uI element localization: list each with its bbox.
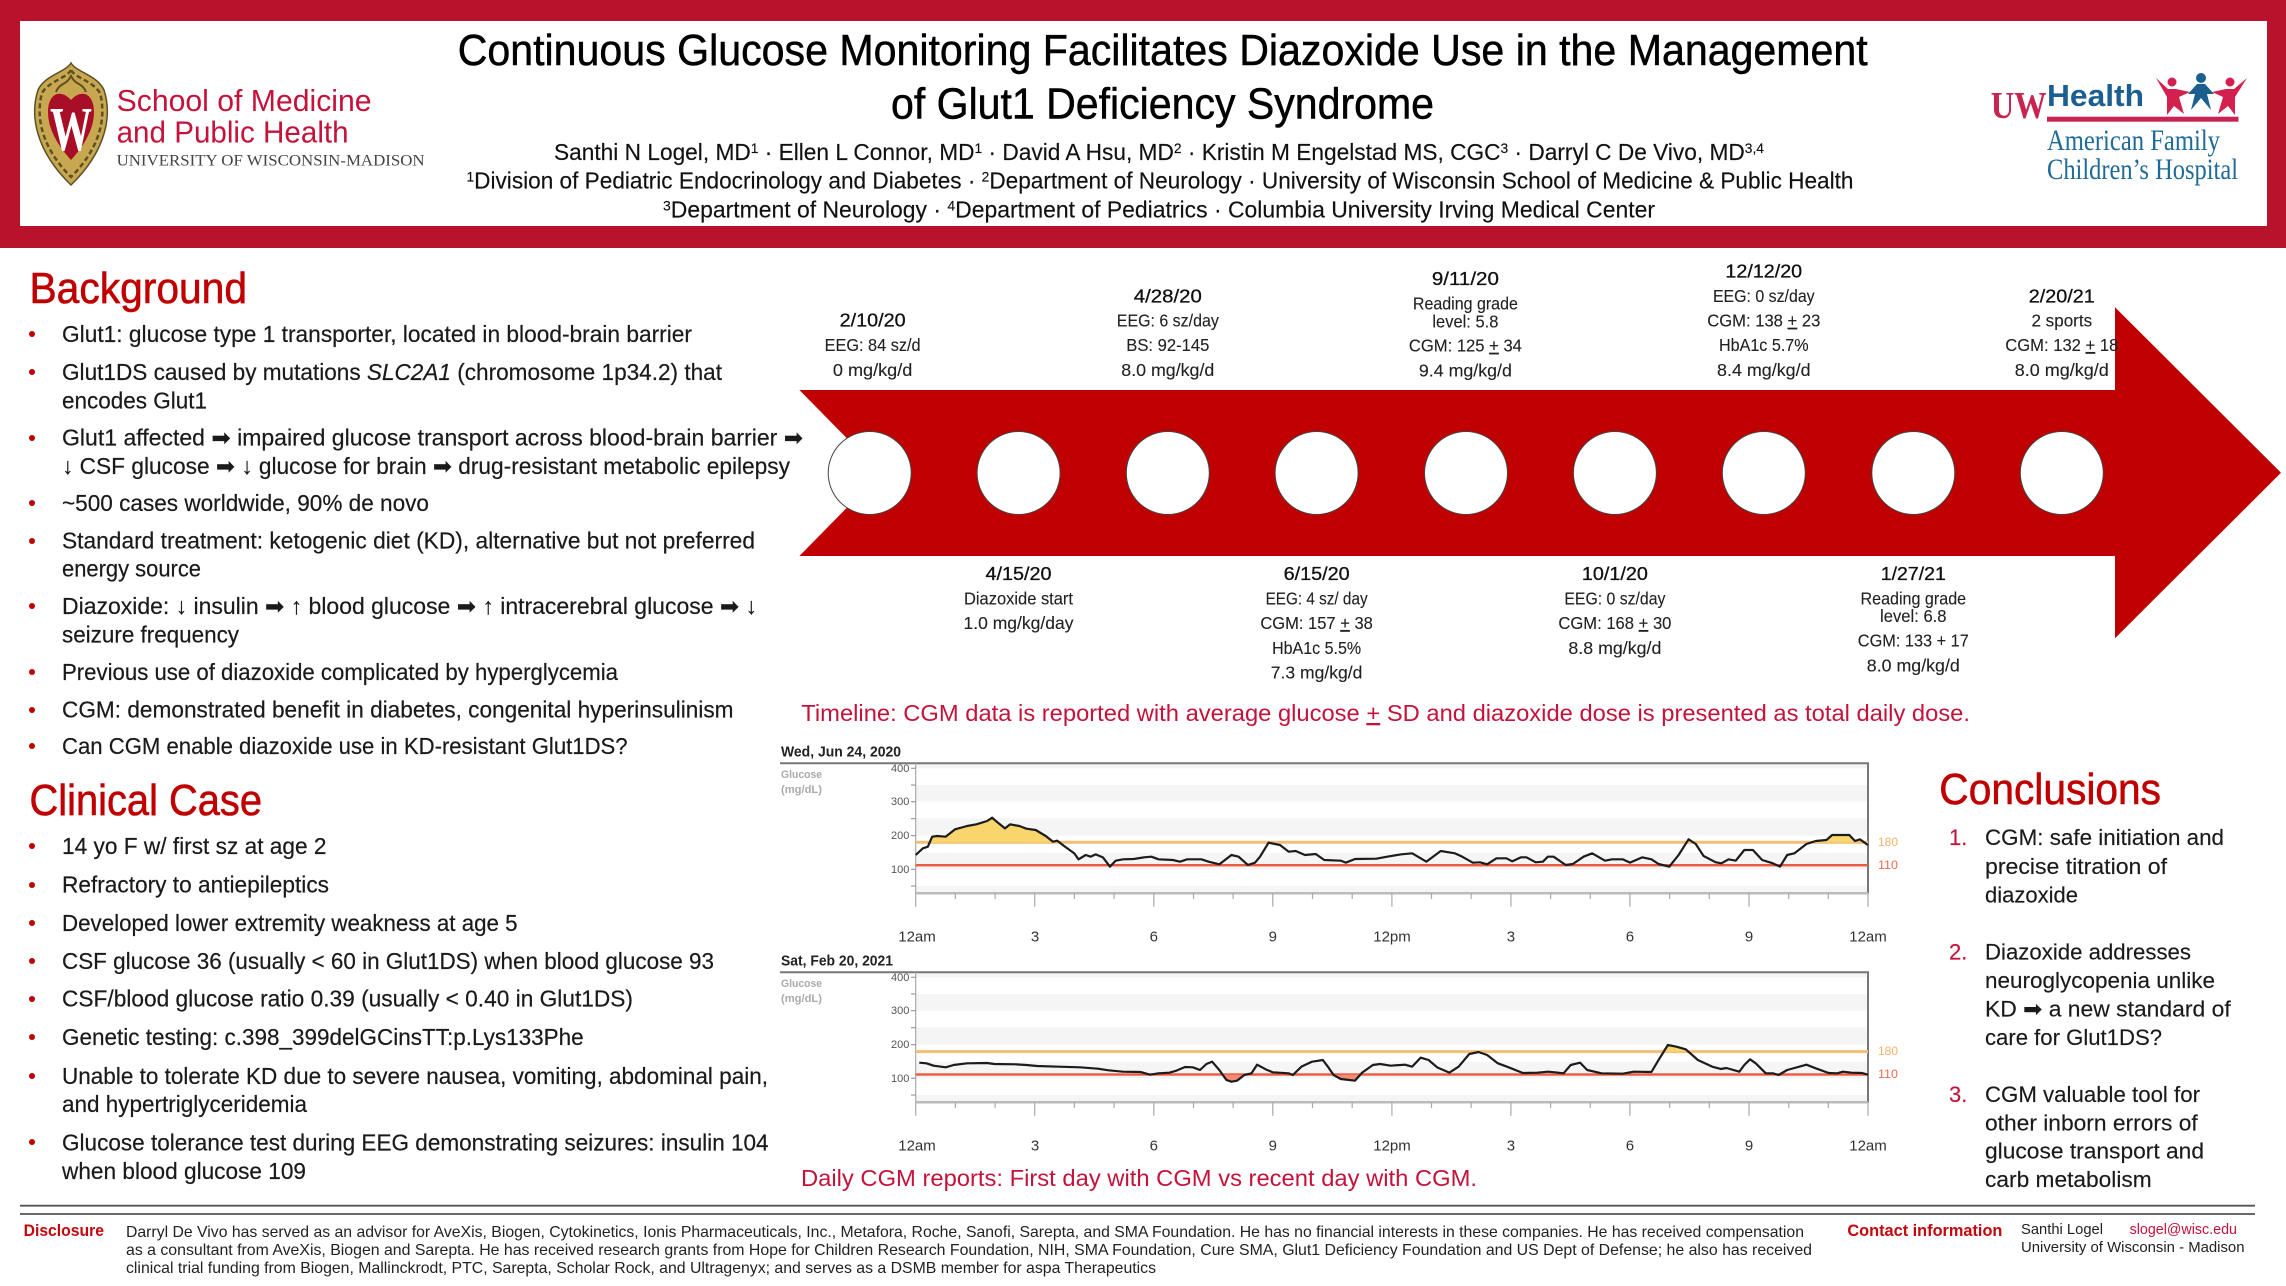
- authors and affiliations: · Kristin M Engelstad MS, CGC: [1182, 139, 1501, 165]
- time axis labels: 12am: [1849, 929, 1887, 946]
- bullet list: clinical case: and hypertriglyceridemia: [62, 1091, 307, 1117]
- glucose trace: [919, 1045, 1868, 1082]
- axis: glucose: 400: [891, 763, 909, 775]
- bullet list: background: ~500 cases worldwide, 90% de novo: [62, 490, 429, 516]
- logo: UW Health American Family Children's Hospital: Children’s Hospital: [2047, 153, 2238, 186]
- conclusion 3: 3.: [1949, 1082, 1967, 1107]
- bullet list: background: [29, 321, 803, 759]
- event: 1/27/21: 8.0 mg/kg/d: [1867, 656, 1960, 676]
- time axis labels: 12am: [1849, 1138, 1887, 1155]
- authors and affiliations: 3: [663, 197, 671, 213]
- bullet list: background: seizure frequency: [62, 622, 239, 648]
- footer: disclosure: clinical trial funding from Biogen, Mallinckrodt, PTC, Sarepta, Scholar Rock, and Ultragenyx; and serves as a DSMB member for aspa Therapeutics: [126, 1260, 1156, 1277]
- conclusion 3: other inborn errors of: [1985, 1111, 2199, 1136]
- authors and affiliations: · Darryl C De Vivo, MD: [1508, 139, 1745, 165]
- event: 10/1/20: CGM: 168 + 30: [1558, 613, 1672, 633]
- axis: glucose: (mg/dL): [781, 993, 822, 1005]
- axis: glucose: 100: [891, 864, 909, 876]
- authors and affiliations: · David A Hsu, MD: [982, 139, 1174, 165]
- axis: glucose: 200: [891, 830, 909, 842]
- event: 9/11/20: Reading grade: [1413, 293, 1518, 313]
- authors and affiliations: 1: [466, 169, 474, 185]
- logo text: UNIVERSITY OF WISCONSIN-MADISON: [117, 153, 425, 170]
- target lines: 110: [1878, 1067, 1898, 1081]
- event: 1/27/21: [1858, 563, 1969, 676]
- event: 4/28/20: [1117, 285, 1219, 380]
- bullet list: background: Standard treatment: ketogenic diet (KD), alternative but not preferred: [62, 528, 755, 554]
- bullet list: clinical case: [29, 833, 769, 1184]
- logo text: School of Medicine: [117, 83, 372, 118]
- event: 4/15/20: 1.0 mg/kg/day: [964, 613, 1074, 633]
- authors and affiliations: 4: [947, 197, 955, 213]
- bullet list: background: Glut1DS caused by mutations SLC2A1 (chromosome 1p34.2) that: [62, 359, 723, 385]
- conclusion 2: KD ➡ a new standard of: [1985, 997, 2232, 1022]
- time axis labels: 6: [1150, 1138, 1158, 1155]
- time axis labels: [898, 1138, 1887, 1155]
- event: 1/27/21: level: 6.8: [1880, 606, 1947, 626]
- bullet list: background: CGM: demonstrated benefit in diabetes, congenital hyperinsulinism: [62, 697, 734, 723]
- chart: Sat, Feb 20, 2021: [780, 953, 1898, 1155]
- event: 9/11/20: [1409, 268, 1522, 381]
- event: 12/12/20: [1707, 261, 1820, 380]
- bullet list: background: Diazoxide: ↓ insulin ➡ ↑ blood glucose ➡ ↑ intracerebral glucose ➡ ↓: [62, 593, 757, 619]
- event: 2/20/21: 2 sports: [2031, 311, 2092, 331]
- footer: disclosure: Disclosure: [24, 1221, 104, 1240]
- footer: contact information: [1847, 1221, 2244, 1256]
- footer: disclosure: [24, 1221, 1812, 1277]
- time axis labels: 3: [1507, 929, 1515, 946]
- event: 9/11/20: 9/11/20: [1432, 268, 1499, 289]
- conclusion 2: Diazoxide addresses: [1985, 939, 2191, 964]
- event: 1/27/21: CGM: 133 + 17: [1858, 631, 1969, 651]
- logo: UW Health American Family Children's Hospital: American Family: [2047, 124, 2220, 157]
- event: 12/12/20: EEG: 0 sz/day: [1713, 286, 1815, 306]
- event: 12/12/20: 8.4 mg/kg/d: [1717, 360, 1811, 380]
- axis: glucose: 300: [891, 1005, 909, 1017]
- bullet list: clinical case: Glucose tolerance test during EEG demonstrating seizures: insulin 104: [62, 1130, 769, 1156]
- authors and affiliations: Santhi N Logel, MD: [554, 139, 753, 165]
- axis: glucose: 300: [891, 796, 909, 808]
- event: 6/15/20: 7.3 mg/kg/d: [1271, 662, 1362, 682]
- bullet list: clinical case: when blood glucose 109: [61, 1158, 306, 1184]
- time axis labels: 3: [1507, 1138, 1515, 1155]
- event: 1/27/21: Reading grade: [1860, 588, 1966, 608]
- event: 4/15/20: 4/15/20: [986, 563, 1052, 584]
- authors and affiliations: · Ellen L Connor, MD: [758, 139, 974, 165]
- conclusion 1: CGM: safe initiation and: [1985, 825, 2224, 850]
- event: 4/15/20: Diazoxide start: [964, 588, 1073, 608]
- bullet list: background: Can CGM enable diazoxide use in KD-resistant Glut1DS?: [62, 733, 628, 759]
- conclusion 3: carb metabolism: [1985, 1167, 2152, 1192]
- time axis labels: 3: [1031, 929, 1039, 946]
- panel: background: [29, 264, 803, 759]
- authors and affiliations: 2: [1174, 140, 1182, 156]
- icon: university crest: W: [50, 96, 92, 164]
- time axis labels: 9: [1745, 1138, 1753, 1155]
- bullet list: background: encodes Glut1: [62, 388, 207, 414]
- time axis labels: 12am: [898, 1138, 936, 1155]
- event: 2/10/20: 2/10/20: [840, 310, 906, 331]
- logo text: and Public Health: [117, 115, 349, 150]
- axis: glucose: [781, 763, 916, 886]
- event: 9/11/20: level: 5.8: [1432, 311, 1498, 331]
- bullet list: clinical case: Refractory to antiepileptics: [62, 872, 329, 898]
- authors and affiliations: Department of Neurology · University of Wisconsin School of Medicine & Public Health: [989, 168, 1854, 194]
- target lines: [916, 1044, 1898, 1081]
- event: 12/12/20: HbA1c 5.7%: [1719, 335, 1809, 355]
- heading: Conclusions: Conclusions: [1939, 765, 2161, 814]
- event: 1/27/21: 1/27/21: [1881, 563, 1946, 584]
- logo: UW Health American Family Children's Hospital: UW: [1991, 85, 2047, 127]
- time axis labels: [898, 929, 1887, 946]
- conclusion 2: neuroglycopenia unlike: [1985, 968, 2215, 993]
- axis: glucose: 400: [891, 972, 909, 984]
- event: 10/1/20: EEG: 0 sz/day: [1564, 588, 1666, 608]
- event: 2/10/20: EEG: 84 sz/d: [825, 335, 921, 355]
- chart: Wed, Jun 24, 2020: Wed, Jun 24, 2020: [781, 744, 901, 761]
- bullet list: clinical case: CSF/blood glucose ratio 0.39 (usually < 0.40 in Glut1DS): [62, 986, 633, 1012]
- logo: UW Health American Family Children's Hospital: Health: [2047, 78, 2144, 113]
- event: 4/28/20: BS: 92-145: [1126, 335, 1209, 355]
- axis: glucose: 100: [891, 1073, 909, 1085]
- time axis labels: 6: [1150, 929, 1158, 946]
- bullet list: background: energy source: [62, 556, 201, 582]
- bullet list: background: Previous use of diazoxide complicated by hyperglycemia: [62, 659, 618, 685]
- event: 4/28/20: 4/28/20: [1134, 285, 1202, 306]
- logo text: [117, 83, 425, 170]
- bullet list: clinical case: 14 yo F w/ first sz at age 2: [62, 833, 326, 859]
- authors and affiliations: [466, 139, 1854, 222]
- target lines: [916, 835, 1898, 872]
- title: Continuous Glucose Monitoring Facilitates Diazoxide Use in the Management: [458, 26, 1868, 75]
- plot bands: [916, 763, 1868, 893]
- footer: disclosure: as a consultant from AveXis, Biogen and Sarepta. He has received research grants from Hope for Children Research Foundation, NIH, SMA Foundation, Cure SMA, Glut1 Deficiency Foundation and US Dept of Defense; he also has received: [126, 1242, 1812, 1259]
- event: 6/15/20: 6/15/20: [1284, 563, 1350, 584]
- conclusion 3: CGM valuable tool for: [1985, 1082, 2200, 1107]
- event: 6/15/20: EEG: 4 sz/ day: [1266, 588, 1368, 608]
- authors and affiliations: 1: [974, 140, 982, 156]
- timeline markers: [828, 432, 2103, 514]
- event: 4/28/20: 8.0 mg/kg/d: [1121, 360, 1214, 380]
- logo: UW Health American Family Children's Hospital: [1991, 73, 2247, 186]
- time axis labels: 6: [1626, 1138, 1634, 1155]
- conclusion 2: [1949, 939, 2232, 1050]
- time axis labels: 12pm: [1373, 929, 1411, 946]
- event: 6/15/20: CGM: 157 + 38: [1260, 613, 1373, 633]
- axis: glucose: Glucose: [781, 978, 822, 990]
- conclusion 3: [1949, 1082, 2204, 1192]
- authors and affiliations: 2: [982, 169, 990, 185]
- event: 6/15/20: HbA1c 5.5%: [1272, 638, 1361, 658]
- heading: Clinical Case: Clinical Case: [30, 776, 262, 825]
- footer: contact information: Contact information: [1847, 1221, 2002, 1240]
- target lines: 180: [1878, 1044, 1898, 1058]
- conclusion 2: care for Glut1DS?: [1985, 1025, 2162, 1050]
- axis: glucose: Glucose: [781, 769, 822, 781]
- footer: contact information: slogel@wisc.edu: [2130, 1221, 2237, 1238]
- event: 2/10/20: [825, 310, 921, 380]
- event: 9/11/20: 9.4 mg/kg/d: [1419, 361, 1512, 381]
- conclusion 1: diazoxide: [1985, 883, 2078, 908]
- event: 9/11/20: CGM: 125 + 34: [1409, 336, 1522, 356]
- authors and affiliations: 3: [1501, 140, 1508, 156]
- axis: glucose: 200: [891, 1039, 909, 1051]
- bullet list: clinical case: Genetic testing: c.398_399delGCinsTT:p.Lys133Phe: [62, 1024, 584, 1050]
- bullet list: clinical case: Developed lower extremity weakness at age 5: [62, 910, 518, 936]
- footer: contact information: Santhi Logel: [2021, 1221, 2103, 1238]
- target lines: 180: [1878, 835, 1898, 849]
- event: 4/15/20: [964, 563, 1074, 633]
- conclusion 1: [1949, 825, 2224, 908]
- event: 2/20/21: [2005, 285, 2118, 380]
- event: 2/20/21: CGM: 132 + 18: [2005, 335, 2118, 355]
- authors and affiliations: 3,4: [1745, 140, 1764, 156]
- glucose trace: [916, 818, 1868, 867]
- footer: disclosure: Darryl De Vivo has served as an advisor for AveXis, Biogen, Cytokinetics, Ionis Pharmaceuticals, Inc., Metafora, Roche, Sanofi, Sarepta, and SMA Foundation. He has no financial interests in these companies. He has received compensation: [126, 1224, 1804, 1241]
- time axis labels: 12am: [898, 929, 936, 946]
- conclusion 3: glucose transport and: [1985, 1139, 2204, 1164]
- arrow: [799, 307, 2281, 638]
- event: 10/1/20: 10/1/20: [1582, 563, 1648, 584]
- time axis labels: 9: [1269, 929, 1277, 946]
- axis: glucose: [781, 972, 916, 1095]
- caption: timeline: Timeline: CGM data is reported with average glucose + SD and diazoxide dose is presented as total daily dose.: [801, 700, 1970, 726]
- title: [458, 26, 1868, 128]
- event: 2/10/20: 0 mg/kg/d: [833, 360, 912, 380]
- event: 6/15/20: [1260, 563, 1373, 682]
- bullet list: background: Glut1 affected ➡ impaired glucose transport across blood-brain barrier ➡: [62, 425, 803, 451]
- bullet list: clinical case: Unable to tolerate KD due to severe nausea, vomiting, abdominal pain,: [62, 1063, 768, 1089]
- caption: daily CGM reports: Daily CGM reports: First day with CGM vs recent day with CGM.: [801, 1165, 1477, 1191]
- footer: contact information: University of Wisconsin - Madison: [2021, 1239, 2244, 1256]
- conclusion 1: 1.: [1949, 825, 1967, 850]
- panel: conclusions: [1939, 765, 2232, 1192]
- time axis labels: 3: [1031, 1138, 1039, 1155]
- time axis labels: 9: [1745, 929, 1753, 946]
- event: 12/12/20: CGM: 138 + 23: [1707, 311, 1820, 331]
- time axis labels: 6: [1626, 929, 1634, 946]
- chart: Sat, Feb 20, 2021: Sat, Feb 20, 2021: [781, 953, 893, 970]
- authors and affiliations: 1: [751, 140, 759, 156]
- event: 10/1/20: [1558, 563, 1672, 658]
- bullet list: background: Glut1: glucose type 1 transporter, located in blood-brain barrier: [62, 321, 692, 347]
- bullet list: background: ↓ CSF glucose ➡ ↓ glucose for brain ➡ drug-resistant metabolic epilepsy: [62, 453, 790, 479]
- time axis labels: 12pm: [1373, 1138, 1411, 1155]
- time axis labels: 9: [1269, 1138, 1277, 1155]
- event: 2/20/21: 8.0 mg/kg/d: [2015, 360, 2109, 380]
- event: 10/1/20: 8.8 mg/kg/d: [1568, 638, 1661, 658]
- authors and affiliations: Division of Pediatric Endocrinology and Diabetes ·: [474, 168, 982, 194]
- timeline: [799, 261, 2281, 682]
- panel: clinical case: [29, 776, 769, 1184]
- header band: [0, 0, 2286, 248]
- event: 4/28/20: EEG: 6 sz/day: [1117, 311, 1219, 331]
- logo: School of Medicine and Public Health: [35, 63, 425, 185]
- event: 2/20/21: 2/20/21: [2029, 285, 2095, 306]
- conclusion 1: precise titration of: [1985, 854, 2168, 879]
- authors and affiliations: Department of Neurology ·: [671, 196, 947, 222]
- chart: Wed, Jun 24, 2020: [780, 744, 1898, 946]
- bullet list: clinical case: CSF glucose 36 (usually < 60 in Glut1DS) when blood glucose 93: [62, 948, 714, 974]
- plot bands: [916, 972, 1868, 1102]
- icon: three children holding hands: [2156, 73, 2247, 115]
- event: 12/12/20: 12/12/20: [1725, 261, 1802, 282]
- target lines: 110: [1878, 858, 1898, 872]
- axis: glucose: (mg/dL): [781, 784, 822, 796]
- conclusion 2: 2.: [1949, 939, 1967, 964]
- authors and affiliations: Department of Pediatrics · Columbia University Irving Medical Center: [955, 196, 1655, 222]
- title: of Glut1 Deficiency Syndrome: [891, 79, 1434, 128]
- heading: Background: Background: [30, 264, 247, 313]
- icon: university crest: [35, 63, 107, 185]
